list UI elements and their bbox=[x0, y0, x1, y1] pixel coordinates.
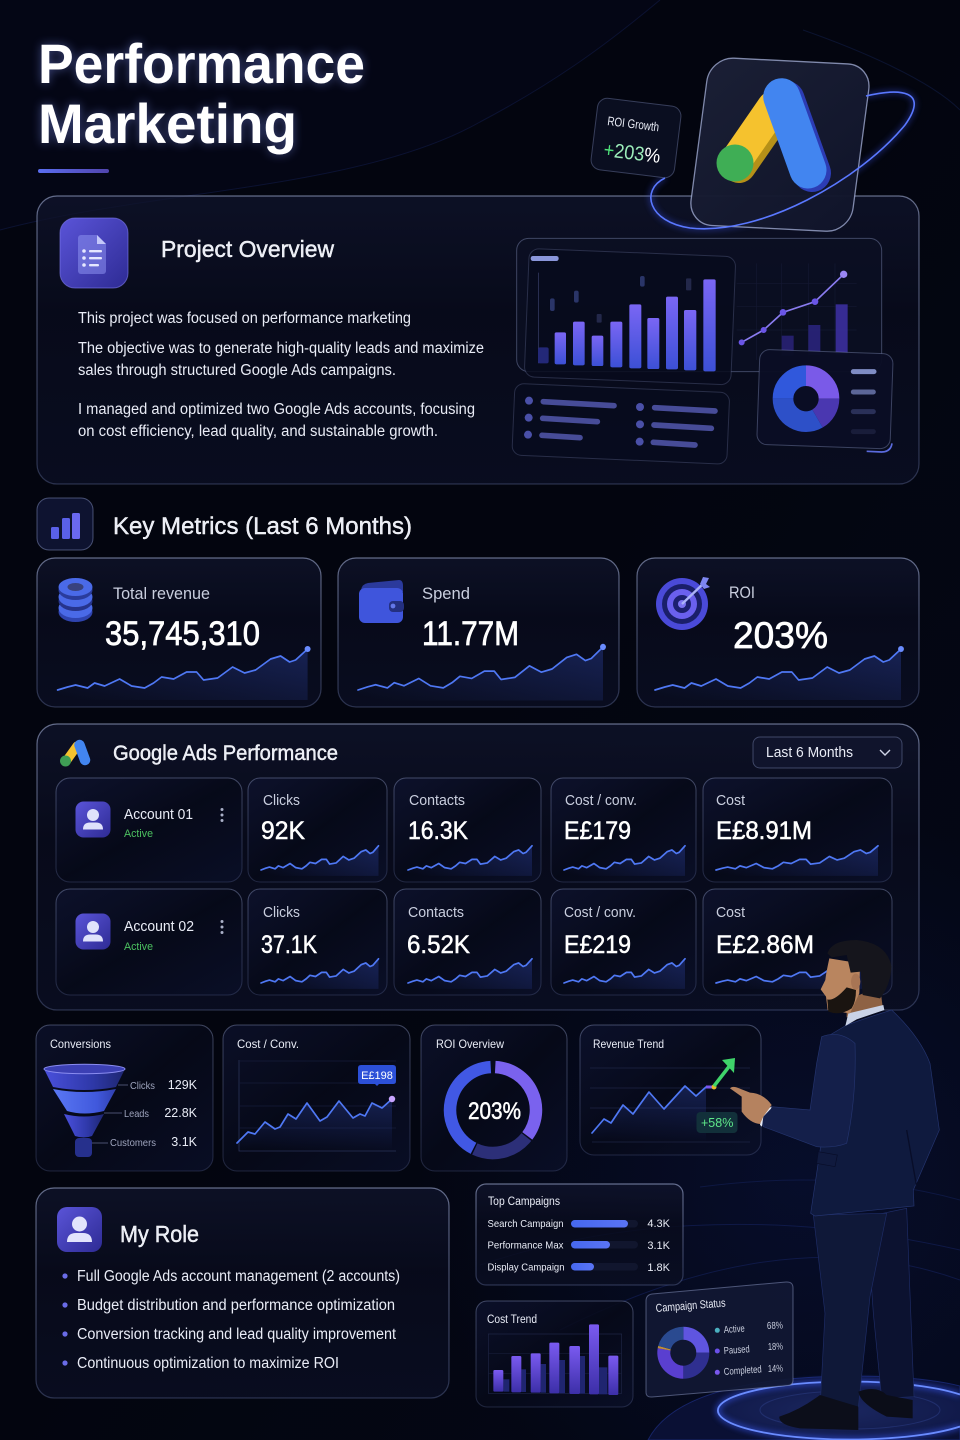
icon: coins bbox=[58, 578, 92, 622]
legend: 68% bbox=[767, 1320, 783, 1332]
panel: project overview bbox=[37, 196, 919, 484]
metric: contacts 16.3K: 16.3K bbox=[408, 817, 468, 845]
donut value: 203% bbox=[468, 1098, 521, 1125]
roi growth badge: ROI Growth bbox=[607, 114, 660, 134]
name: Account 02 bbox=[124, 919, 194, 935]
campaign row: performance max bbox=[488, 1240, 671, 1252]
orbit ring glow bbox=[651, 92, 914, 229]
growth badge: +58% bbox=[701, 1116, 733, 1130]
metric: clicks 37.1K: Clicks bbox=[263, 905, 300, 921]
bullet list: Conversion tracking and lead quality improvement bbox=[77, 1326, 397, 1343]
campaign row: search bbox=[488, 1218, 671, 1230]
panel: conversions funnel: Conversions bbox=[50, 1037, 111, 1051]
legend: 18% bbox=[768, 1341, 783, 1353]
metric: cost per conv E£219: Cost / conv. bbox=[564, 905, 636, 921]
legend: Completed bbox=[723, 1364, 762, 1378]
donut chart bbox=[664, 1333, 703, 1372]
panel: cost per conversion chart: Cost / Conv. bbox=[237, 1037, 299, 1051]
avatar icon bbox=[76, 914, 110, 950]
title bbox=[38, 32, 365, 155]
heading: My Role bbox=[120, 1221, 199, 1247]
label: ROI bbox=[729, 583, 755, 602]
panel: my role bbox=[36, 1188, 449, 1398]
metric: contacts 6.52K: Contacts bbox=[408, 905, 464, 921]
presenter figure bbox=[730, 940, 939, 1430]
metric: clicks 92K bbox=[248, 778, 387, 882]
funnel labels bbox=[110, 1080, 156, 1149]
heading: project overview: Project Overview bbox=[161, 236, 334, 262]
overview text: sales through structured Google Ads campaigns. bbox=[78, 362, 396, 379]
panel: google ads performance bbox=[37, 724, 919, 1010]
funnel labels: Customers bbox=[110, 1137, 156, 1149]
metric: cost per conv E£179: E£179 bbox=[564, 817, 631, 845]
metric: contacts 16.3K: Contacts bbox=[409, 793, 465, 809]
title underline bbox=[38, 169, 109, 173]
funnel values: 3.1K bbox=[171, 1135, 198, 1149]
label: Total revenue bbox=[113, 584, 210, 603]
value badge bbox=[358, 1065, 396, 1086]
icon: target bbox=[656, 577, 710, 630]
icon: wallet bbox=[359, 580, 404, 623]
roi growth badge: +203% bbox=[602, 139, 662, 168]
dropdown bbox=[753, 737, 902, 768]
label: Spend bbox=[422, 584, 470, 603]
icon: bar chart bbox=[37, 498, 93, 550]
icon: google ads logo bbox=[60, 745, 85, 766]
panel: cost trend: Cost Trend bbox=[487, 1314, 537, 1326]
bullet list bbox=[62, 1268, 400, 1372]
status: Active bbox=[124, 941, 153, 953]
value badge: E£198 bbox=[361, 1070, 393, 1082]
funnel values: 22.8K bbox=[164, 1106, 198, 1120]
campaign row: display: 1.8K bbox=[647, 1262, 671, 1274]
bullet list: Continuous optimization to maximize ROI bbox=[77, 1355, 339, 1372]
card: roi bbox=[637, 558, 919, 707]
metric: clicks 37.1K: 37.1K bbox=[261, 931, 317, 959]
donut chart bbox=[450, 1067, 536, 1153]
overview text: I managed and optimized two Google Ads accounts, focusing bbox=[78, 401, 475, 418]
value: 35,745,310 bbox=[105, 615, 260, 653]
sparkline bbox=[655, 646, 904, 700]
panel: roi overview bbox=[421, 1025, 567, 1171]
metric: cost per conv E£179 bbox=[551, 778, 696, 882]
title: Performance bbox=[38, 32, 365, 95]
metric: contacts 6.52K: 6.52K bbox=[407, 931, 470, 959]
name: Account 01 bbox=[124, 807, 193, 823]
value: 203% bbox=[733, 615, 828, 656]
panel: conversions funnel bbox=[36, 1025, 213, 1171]
funnel labels: Leads bbox=[124, 1108, 149, 1120]
card: spend bbox=[338, 558, 619, 707]
icon: document bbox=[60, 218, 128, 288]
metric: cost E£2.86M: E£2.86M bbox=[716, 931, 814, 959]
growth badge bbox=[696, 1112, 738, 1133]
metric: cost per conv E£179: Cost / conv. bbox=[565, 793, 637, 809]
legend: Active bbox=[723, 1324, 745, 1336]
campaign row: search: Search Campaign bbox=[488, 1218, 564, 1230]
dropdown: Last 6 Months bbox=[766, 745, 853, 761]
funnel values: 129K bbox=[168, 1078, 198, 1092]
orbit ring front bbox=[651, 92, 914, 229]
status: Active bbox=[124, 828, 153, 840]
card: total revenue bbox=[37, 558, 321, 707]
funnel values bbox=[164, 1078, 198, 1149]
avatar icon bbox=[76, 802, 110, 838]
sparkline bbox=[358, 644, 606, 700]
campaign row: display bbox=[488, 1262, 671, 1274]
metric: cost E£2.86M bbox=[703, 889, 892, 995]
account 02 bbox=[56, 889, 242, 995]
icon: person bbox=[57, 1207, 102, 1252]
legend: Paused bbox=[723, 1344, 750, 1357]
funnel labels: Clicks bbox=[130, 1080, 155, 1092]
overview text: The objective was to generate high-quality leads and maximize bbox=[78, 340, 484, 357]
metric: contacts 6.52K bbox=[394, 889, 541, 995]
platform bbox=[648, 1376, 960, 1440]
icon: google ads card bbox=[688, 57, 872, 232]
campaign row: performance max: Performance Max bbox=[488, 1240, 564, 1252]
line chart bbox=[590, 1068, 750, 1142]
sparkline bbox=[58, 646, 311, 700]
metric: cost E£8.91M: E£8.91M bbox=[716, 817, 812, 845]
metric: cost per conv E£219: E£219 bbox=[564, 931, 631, 959]
funnel chart bbox=[44, 1064, 125, 1157]
panel: cost trend bbox=[476, 1301, 633, 1407]
panel: top campaigns: Top Campaigns bbox=[488, 1196, 560, 1208]
panel: campaign status bbox=[646, 1282, 793, 1397]
legend bbox=[715, 1320, 783, 1378]
metric: clicks 92K: 92K bbox=[261, 817, 305, 845]
value: 11.77M bbox=[422, 615, 519, 653]
metric: cost E£2.86M: Cost bbox=[716, 905, 745, 921]
overview text: This project was focused on performance marketing bbox=[78, 310, 411, 327]
campaign row: search: 4.3K bbox=[647, 1218, 671, 1230]
panel: revenue trend bbox=[580, 1025, 761, 1155]
metric: clicks 92K: Clicks bbox=[263, 793, 300, 809]
menu dots bbox=[220, 920, 224, 934]
bullet list: Full Google Ads account management (2 accounts) bbox=[77, 1268, 400, 1285]
panel: roi overview: ROI Overview bbox=[436, 1037, 504, 1051]
panel: top campaigns bbox=[476, 1184, 683, 1285]
bar chart bbox=[488, 1324, 622, 1395]
metric: cost E£8.91M: Cost bbox=[716, 793, 745, 809]
roi growth badge bbox=[590, 97, 682, 179]
metric: clicks 37.1K bbox=[248, 889, 387, 995]
heading: key metrics bbox=[37, 498, 412, 550]
title: Marketing bbox=[38, 92, 297, 155]
metric: contacts 16.3K bbox=[394, 778, 541, 882]
campaign row: display: Display Campaign bbox=[488, 1262, 565, 1274]
menu dots bbox=[220, 808, 224, 822]
overview text: on cost efficiency, lead quality, and sustainable growth. bbox=[78, 423, 438, 440]
panel: cost per conversion chart bbox=[223, 1025, 410, 1171]
line chart bbox=[237, 1060, 396, 1151]
metric: cost E£8.91M bbox=[703, 778, 892, 882]
overview text bbox=[78, 310, 484, 440]
panel: campaign status: Campaign Status bbox=[655, 1298, 726, 1315]
icon: growth arrow bbox=[714, 1058, 735, 1086]
metric: cost per conv E£219 bbox=[551, 889, 696, 995]
bullet list: Budget distribution and performance optimization bbox=[77, 1297, 395, 1314]
panel: revenue trend: Revenue Trend bbox=[593, 1037, 664, 1051]
heading: Google Ads Performance bbox=[113, 742, 338, 765]
campaign row: performance max: 3.1K bbox=[647, 1240, 671, 1252]
legend: 14% bbox=[768, 1363, 783, 1375]
key metrics title: Key Metrics (Last 6 Months) bbox=[113, 513, 412, 540]
dashboard illustration bbox=[512, 238, 893, 464]
account 01 bbox=[56, 778, 242, 882]
